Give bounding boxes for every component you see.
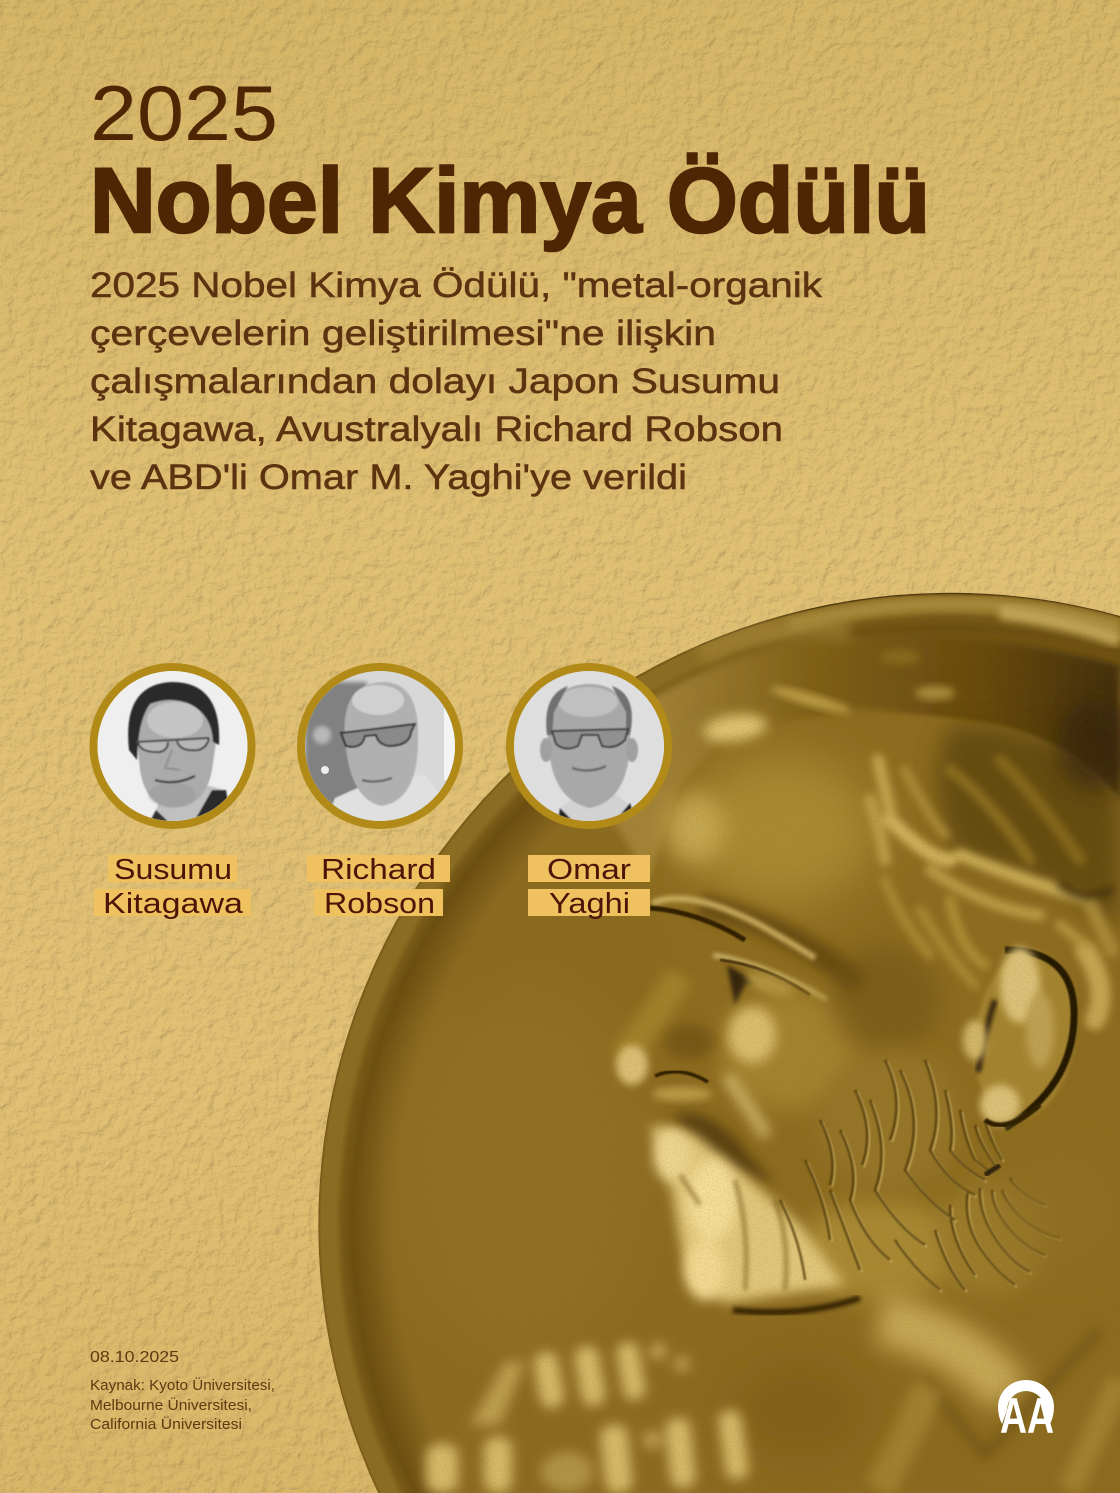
prize name: Nobel Kimya Ödülü (90, 150, 930, 252)
source: Melbourne Üniversitesi, (90, 1396, 252, 1414)
description paragraph: ve ABD'li Omar M. Yaghi'ye verildi (90, 458, 687, 497)
hair strokes (870, 760, 1112, 1020)
source (90, 1376, 275, 1433)
field above the head (600, 634, 1120, 880)
beard (650, 1050, 1062, 1312)
brow shadow (700, 905, 860, 985)
name label: Richard Robson: Richard (321, 854, 436, 886)
eye (713, 955, 827, 1000)
name label: Omar Yaghi (528, 854, 650, 920)
description paragraph (90, 266, 823, 497)
blurred medal lettering (426, 1341, 750, 1493)
name label: Richard Robson: Robson (324, 888, 435, 920)
metal grain (427, 600, 1120, 1493)
name label: Omar Yaghi: Yaghi (549, 888, 630, 920)
name label: Susumu Kitagawa: Susumu (114, 854, 232, 886)
description paragraph: çerçevelerin geliştirilmesi"ne ilişkin (90, 314, 716, 353)
moustache shadow (672, 1113, 775, 1185)
description paragraph: 2025 Nobel Kimya Ödülü, "metal-organik (90, 266, 823, 305)
year: 2025 (90, 69, 278, 157)
portrait: Richard Robson (301, 667, 459, 825)
description paragraph: Kitagawa, Avustralyalı Richard Robson (90, 410, 783, 449)
hair dark mass (937, 725, 1120, 930)
source: Kaynak: Kyoto Üniversitesi, (90, 1376, 275, 1394)
name label: Susumu Kitagawa: Kitagawa (103, 888, 244, 920)
head (612, 648, 1120, 1186)
icon: AA logo: AA (1000, 1388, 1054, 1444)
forehead lights (685, 755, 875, 905)
ear (963, 944, 1086, 1128)
description paragraph: çalışmalarından dolayı Japon Susumu (90, 362, 780, 401)
nobel medal with portrait relief (318, 592, 1120, 1493)
portrait: Omar Yaghi (510, 667, 668, 825)
nose (622, 975, 680, 1058)
name label: Susumu Kitagawa (94, 854, 251, 920)
source: California Üniversitesi (90, 1415, 242, 1433)
medal rim (700, 593, 1120, 655)
name label: Omar Yaghi: Omar (547, 854, 631, 886)
icon: AA logo (998, 1380, 1054, 1444)
cheek (720, 990, 860, 1110)
name label: Richard Robson (307, 854, 450, 920)
title (90, 69, 930, 252)
date: 08.10.2025 (90, 1349, 179, 1366)
neck and collar (730, 1150, 1120, 1490)
portrait: Susumu Kitagawa (94, 667, 252, 825)
